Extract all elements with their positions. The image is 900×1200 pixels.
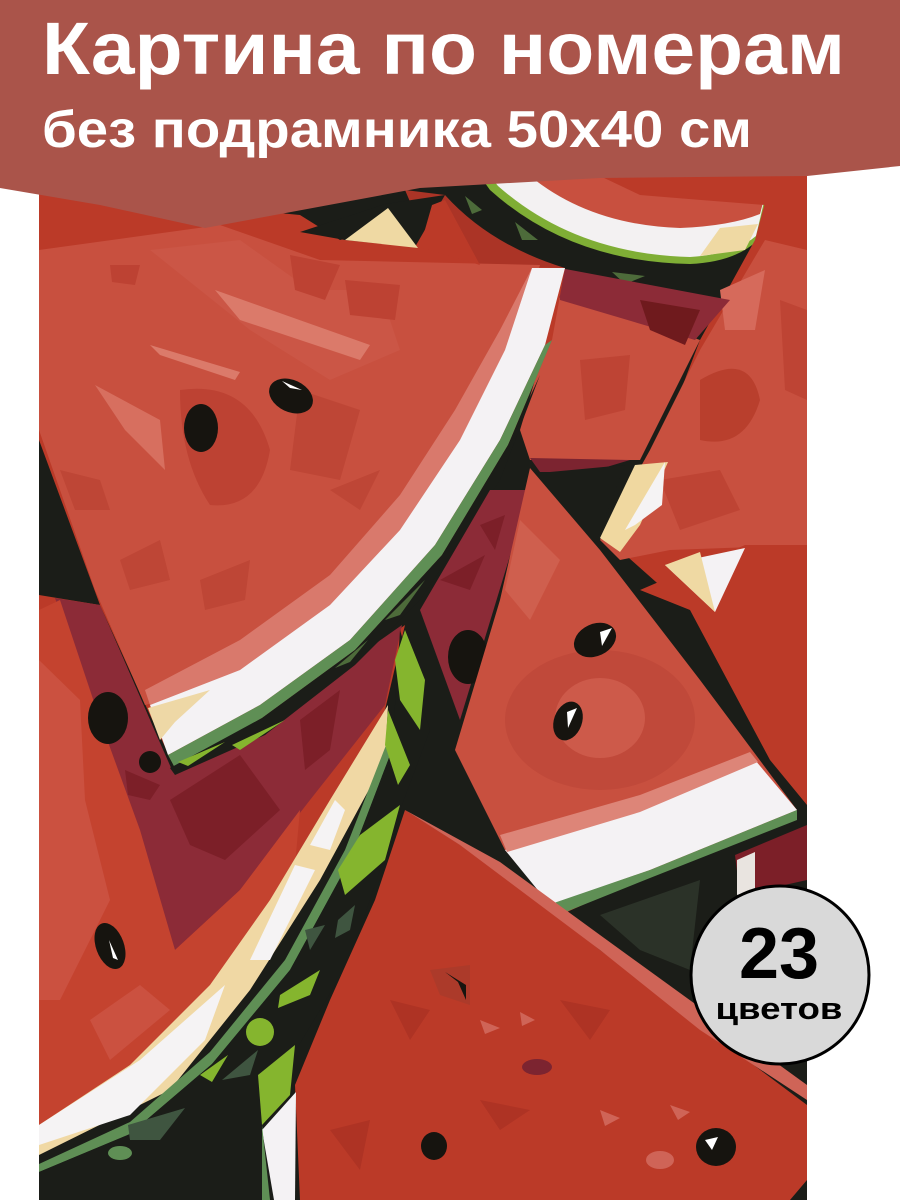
painting: watermelon slices — [39, 176, 807, 1200]
watermelon slice: lower left dark pink — [39, 595, 405, 1172]
dark rind with green patches — [39, 630, 430, 1200]
header banner — [0, 0, 900, 228]
watermelon slice: right edge — [600, 545, 807, 970]
watermelon slice: top right rind — [465, 176, 780, 284]
badge number: 23 — [739, 914, 819, 994]
top left dark wedge — [300, 195, 445, 247]
watermelon slice: center dark pink behind — [420, 490, 530, 720]
watermelon slice: center right triangle — [455, 468, 797, 915]
watermelon slice: bottom — [262, 810, 807, 1200]
badge: 23 colours — [691, 886, 869, 1064]
watermelon slice: upper right — [600, 176, 807, 660]
seeds on big slice — [184, 372, 319, 452]
title: Картина по номерам — [42, 7, 845, 90]
badge label: цветов — [716, 991, 842, 1026]
red flesh under the top arc — [405, 190, 565, 268]
green patches on dark arc — [465, 196, 645, 284]
top left red corner — [420, 200, 480, 265]
watermelon slice: big top left — [39, 190, 565, 775]
watermelon slice: center small — [520, 268, 730, 535]
top left cream rind — [345, 208, 418, 248]
subtitle: без подрамника 50х40 см — [42, 101, 752, 159]
